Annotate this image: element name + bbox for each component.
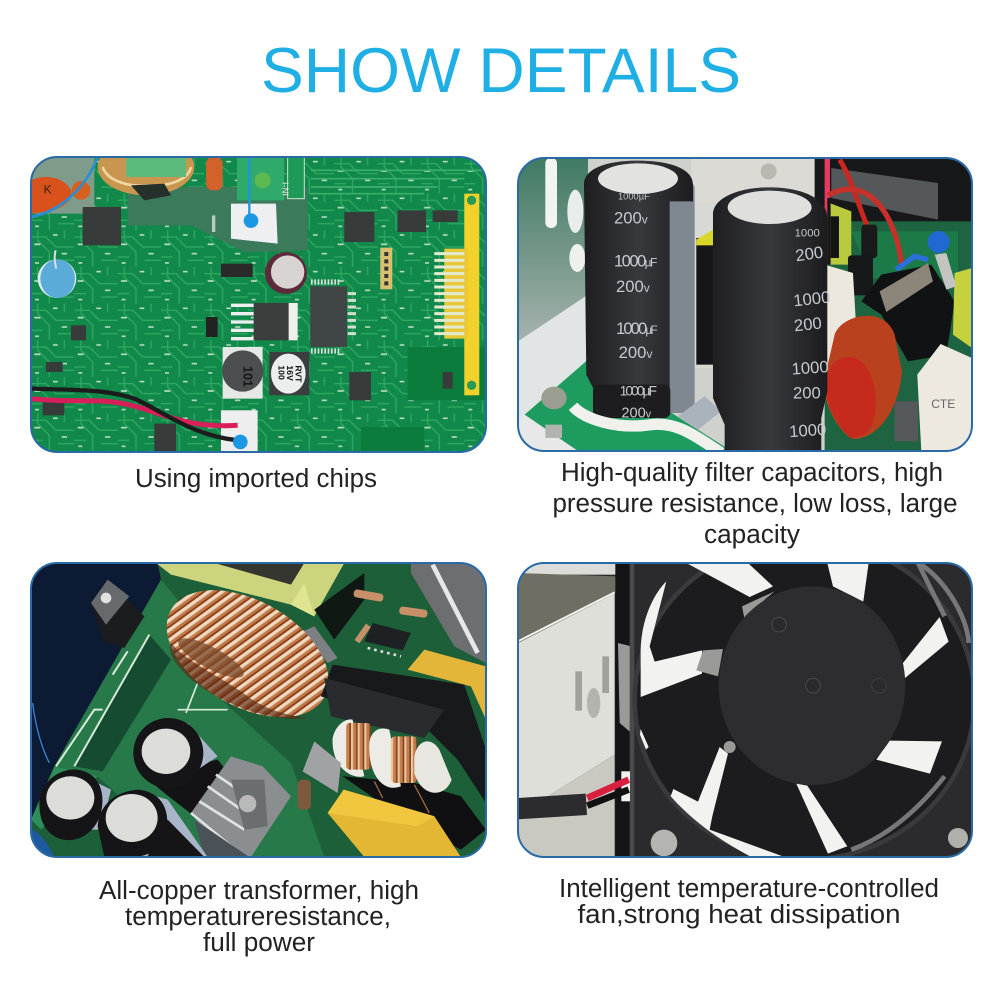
blue corner: [31, 830, 54, 857]
inductor 101: 101: [240, 366, 254, 387]
capacitor 1: [584, 161, 695, 421]
capacitor 2: 200: [793, 313, 823, 335]
red wires: [827, 158, 902, 266]
white and copper coil: [333, 719, 452, 813]
caption: filter capacitors: High-quality filter capacitors, high: [561, 459, 943, 487]
capacitor 100 16V RVT: 16V: [285, 365, 295, 381]
yellow transformer part: [830, 203, 851, 265]
green board: [31, 563, 486, 857]
header pins: [380, 248, 392, 289]
capacitor 1: 1000µF: [618, 192, 650, 202]
capacitor 2: 1000: [791, 357, 829, 379]
capacitor 1: 200v: [614, 209, 648, 228]
ring highlights: [851, 563, 969, 850]
capacitor 2: 1000: [792, 288, 831, 310]
top traces: [309, 170, 486, 194]
white gaps between blades: [640, 563, 949, 857]
main chip: [310, 282, 356, 351]
orange capacitor: K: [44, 183, 52, 197]
grey resistor: [935, 253, 956, 290]
dark top right area: [814, 159, 971, 222]
red film capacitor: [824, 316, 902, 439]
capacitor 1: 1000µF: [620, 382, 657, 398]
dark block: [314, 573, 364, 640]
white wire: [573, 406, 721, 453]
capacitor 100 16V RVT: RVT: [294, 365, 304, 383]
orange resistor: [206, 157, 223, 190]
perforated plate: [519, 159, 588, 450]
capacitor 1: 200v: [619, 343, 652, 362]
top-right aluminium part: [411, 563, 486, 663]
panel: imported chips photo: [31, 139, 486, 452]
heatsink: [191, 756, 291, 857]
resistors: [298, 589, 428, 810]
bearing struts: [696, 591, 775, 753]
capacitor 2: 200: [794, 243, 824, 265]
capacitors: [39, 718, 218, 857]
grey housing: [518, 563, 616, 857]
silver bar: [303, 626, 338, 663]
wire sleeve: [678, 396, 721, 430]
white connector with blue dot: [231, 157, 278, 244]
frame screws: [651, 828, 968, 856]
wire: [518, 771, 630, 809]
white relay box: [917, 344, 972, 451]
panel border 4: [518, 563, 972, 857]
capacitor 2: 200: [793, 384, 821, 403]
panel border 1: [31, 157, 486, 452]
caption: filter capacitors: [552, 459, 958, 549]
caption: imported chips: Using imported chips: [135, 465, 377, 493]
capacitor 100 16V RVT: [269, 352, 309, 395]
rear metal: [692, 159, 814, 206]
black bobbin: [321, 665, 486, 850]
frame strip: [615, 563, 634, 857]
gold toroid: [98, 158, 194, 200]
panel border 2: [518, 158, 972, 451]
caption: copper transformer: temperatureresistance,: [125, 903, 391, 931]
capacitor 1: 200v: [616, 277, 650, 296]
fan hub: [719, 586, 905, 785]
capacitor 2: [713, 187, 831, 451]
aluminium capacitor c34: [265, 252, 307, 294]
parts between capacitors: [695, 226, 713, 368]
power chip u5: [231, 303, 298, 340]
dark board zone: [128, 187, 308, 252]
title: SHOW DETAILS: [261, 36, 741, 106]
panel: filter capacitors photo: [518, 158, 972, 453]
capacitor 1: 1000µF: [614, 252, 657, 271]
board heat-sink strip: [56, 635, 228, 771]
copper toroid: [145, 564, 350, 743]
inductor 101: [222, 347, 263, 399]
yellow connector: [434, 194, 479, 395]
green terminal: I-NI: [281, 182, 291, 196]
caption: cooling fan: [559, 875, 939, 929]
chips: [43, 207, 458, 452]
yellow-green transformer: [156, 563, 344, 616]
blue wire arc: [31, 157, 98, 217]
caption: cooling fan: fan,strong heat dissipation: [578, 901, 900, 929]
panel border 3: [31, 563, 486, 857]
yellow capacitor right: [408, 650, 486, 720]
wires and white plug: [31, 389, 258, 452]
caption: cooling fan: Intelligent temperature-controlled: [559, 875, 939, 903]
green terminal: [237, 157, 304, 200]
capacitor 2: 1000: [795, 227, 820, 239]
orange capacitor: [31, 157, 94, 214]
white ceramic block: [827, 265, 856, 366]
capacitor 1: 200v: [621, 405, 652, 421]
green board: [525, 360, 731, 451]
caption: filter capacitors: capacity: [704, 521, 800, 549]
caption: filter capacitors: pressure resistance, low loss, large: [552, 490, 958, 518]
panel: copper transformer photo: [31, 563, 486, 857]
caption: copper transformer: full power: [203, 929, 316, 957]
blue parts: [896, 231, 950, 270]
black stub: [861, 225, 877, 258]
capacitor 100 16V RVT: 100: [276, 365, 286, 380]
capacitor 2: 1000: [789, 420, 827, 441]
transistor: [91, 580, 144, 648]
thermometer mark: [212, 215, 216, 232]
grey connector: [303, 741, 341, 793]
yellow capacitor bottom: [328, 790, 461, 857]
caption: copper transformer: All-copper transformer, high: [99, 877, 419, 905]
right board: [825, 221, 972, 451]
small black capacitor: [848, 255, 873, 295]
fan opening ring: [635, 540, 975, 860]
small chip: [364, 623, 411, 656]
black capacitor bodies: [144, 760, 231, 816]
capacitor 1: 1000µF: [616, 319, 658, 338]
black inductor: [861, 263, 955, 361]
thin blue arc: [33, 703, 49, 763]
blue capacitor: [38, 250, 76, 298]
right yellow part: [953, 268, 972, 348]
white relay box: CTE: [931, 397, 955, 411]
caption: copper transformer: [99, 877, 419, 957]
screw: [541, 387, 567, 438]
panel: cooling fan photo: [518, 540, 975, 860]
